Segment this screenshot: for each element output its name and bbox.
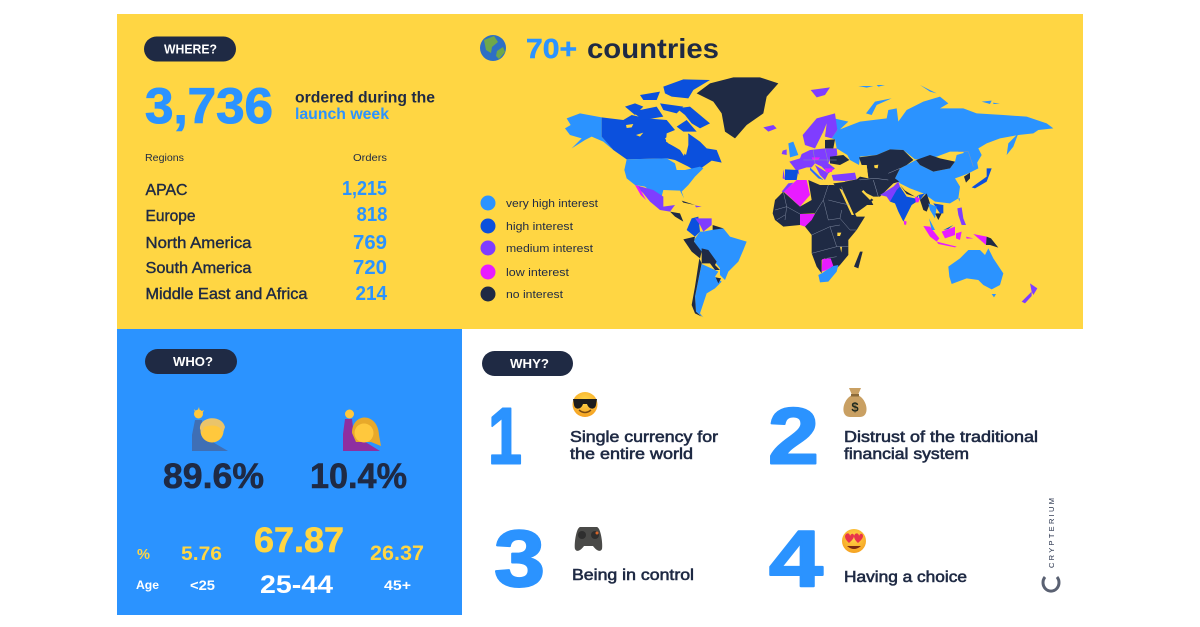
badge: where	[144, 36, 236, 62]
regions table: Regions	[145, 152, 184, 164]
world map	[565, 77, 1053, 317]
map legend	[480, 196, 598, 302]
icon: money bag	[843, 388, 867, 417]
total orders caption: ordered during the	[295, 90, 435, 106]
age breakdown: %	[137, 546, 150, 563]
regions table	[145, 152, 388, 305]
age breakdown: 26.37	[370, 542, 424, 565]
map legend: low interest	[506, 267, 569, 279]
reason 4: 4	[769, 514, 824, 603]
logo: crypterium	[1043, 498, 1059, 591]
map legend: high interest	[506, 221, 573, 233]
icon: globe	[480, 35, 506, 61]
total orders caption: launch week	[295, 106, 389, 123]
men share: 89.6%	[163, 457, 264, 496]
total orders caption	[295, 90, 435, 123]
badge: why: WHY?	[510, 356, 549, 371]
age breakdown: 5.76	[181, 544, 222, 565]
reason 1: the entire world	[570, 446, 693, 463]
icon: money bag: $	[851, 400, 859, 414]
badge: who	[145, 349, 237, 374]
badge: why	[482, 351, 573, 376]
logo: crypterium: CRYPTERIUM	[1047, 498, 1056, 568]
regions table: South America	[146, 260, 252, 277]
panel: who	[117, 329, 462, 615]
panel: why	[482, 351, 1059, 603]
reason 2: financial system	[844, 446, 969, 463]
regions table: Europe	[146, 208, 196, 225]
icon: game controller	[575, 527, 602, 551]
reason 1: 1	[488, 392, 522, 480]
reason 3: Being in control	[572, 567, 694, 584]
regions table: Middle East and Africa	[146, 286, 308, 303]
age breakdown: <25	[190, 577, 215, 593]
icon: sunglasses face	[572, 392, 598, 417]
reason 3: 3	[494, 514, 545, 603]
regions table: 214	[356, 283, 388, 305]
map heading: 70+	[526, 33, 577, 64]
map legend: very high interest	[506, 198, 598, 210]
reason 2: 2	[768, 392, 819, 480]
age breakdown	[136, 521, 424, 599]
age breakdown: Age	[136, 578, 159, 592]
eurasia	[782, 85, 1053, 205]
map heading	[526, 33, 719, 64]
total orders number: 3,736	[145, 78, 273, 134]
panel: where	[117, 14, 1083, 329]
reason 2	[768, 388, 1038, 480]
icon: woman raising hand	[343, 410, 381, 451]
badge: where: WHERE?	[164, 42, 217, 56]
age breakdown: 25-44	[260, 571, 333, 599]
badge: who: WHO?	[173, 354, 213, 369]
age breakdown: 67.87	[254, 521, 344, 560]
africa and the americas south	[635, 180, 873, 317]
reason 2: Distrust of the traditional	[844, 429, 1038, 446]
regions table: North America	[146, 235, 252, 252]
regions table: APAC	[146, 182, 188, 199]
reason 3	[494, 514, 694, 603]
map legend: no interest	[506, 289, 563, 301]
reason 4	[769, 514, 967, 603]
icon: heart eyes face	[842, 529, 866, 553]
age breakdown: 45+	[384, 577, 411, 593]
south asia and oceania	[880, 182, 1037, 303]
women share: 10.4%	[310, 457, 407, 496]
north america and greenland	[565, 77, 778, 198]
regions table: 818	[356, 204, 388, 226]
regions table: 720	[353, 257, 387, 279]
reason 4: Having a choice	[844, 569, 967, 586]
icon: man raising hand	[192, 407, 228, 451]
reason 1	[488, 392, 719, 480]
map legend: medium interest	[506, 243, 593, 255]
regions table: Orders	[353, 152, 387, 164]
map heading: countries	[587, 33, 719, 64]
regions table: 1,215	[342, 178, 387, 200]
reason 1: Single currency for	[570, 429, 719, 446]
regions table: 769	[353, 232, 387, 254]
